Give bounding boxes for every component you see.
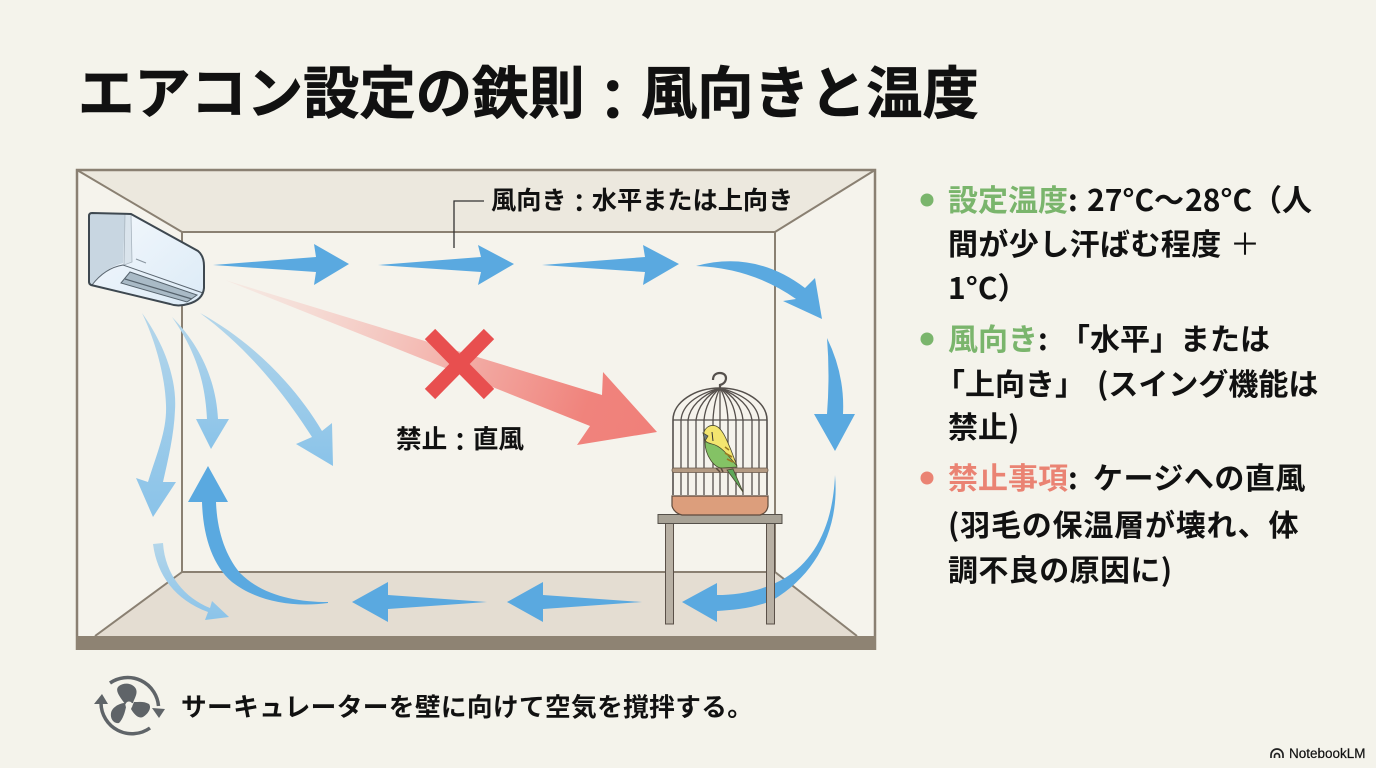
arrows: floor airflow	[188, 466, 836, 622]
floor front edge	[76, 636, 876, 650]
item: set temperature: 設定温度	[948, 176, 1068, 220]
item: wind direction	[920, 315, 1318, 447]
item: wind direction: :	[1038, 315, 1048, 359]
label: forbidden direct wind: 直風	[473, 419, 524, 456]
bullet list	[920, 176, 1318, 590]
budgerigar	[703, 426, 743, 492]
item: set temperature: ＋	[1230, 220, 1260, 264]
item: set temperature: 間が少し汗ばむ程度	[948, 220, 1222, 264]
cage wires	[673, 373, 767, 495]
item: set temperature: 28°C	[1185, 176, 1252, 220]
room illustration	[76, 170, 876, 650]
birdcage with budgerigar	[672, 373, 768, 515]
arrows: upper airflow	[213, 244, 855, 451]
room outline	[77, 170, 875, 650]
ceiling	[77, 170, 875, 232]
item: set temperature: :	[1068, 176, 1078, 220]
label: wind direction: 風向き	[491, 181, 567, 217]
item: set temperature: ～	[1154, 176, 1184, 220]
item: prohibited: (羽毛の保温層が壊れ、体	[948, 501, 1299, 545]
item: prohibited: :	[1068, 454, 1078, 498]
room wall background	[77, 170, 875, 650]
item: prohibited: 調不良の原因に)	[948, 546, 1173, 590]
forbidden direct airflow arrow	[225, 280, 657, 445]
item: prohibited: 禁止事項	[948, 454, 1068, 498]
item: prohibited	[920, 454, 1306, 590]
label: wind direction: 水平または上向き	[592, 181, 793, 217]
item: wind direction: 「水平」または	[1060, 315, 1270, 359]
X mark	[430, 334, 489, 394]
air conditioner	[89, 213, 204, 306]
item: set temperature: （人	[1252, 176, 1312, 220]
circulator note: サーキュレーターを壁に向けて空気を撹拌する。	[181, 687, 753, 724]
label: forbidden direct wind: ：	[447, 422, 473, 459]
perch	[672, 468, 768, 472]
title: 風向きと温度	[641, 49, 979, 130]
floor	[95, 572, 857, 636]
item: wind direction: (スイング機能は	[1097, 360, 1318, 404]
item: set temperature: 27°C	[1087, 176, 1154, 220]
leader line	[454, 201, 484, 248]
item: set temperature: 1°C）	[948, 264, 1028, 308]
table	[658, 514, 782, 624]
item: wind direction: 「上向き」	[935, 360, 1085, 404]
NotebookLM logo: NotebookLM	[1289, 746, 1366, 761]
item: set temperature	[920, 176, 1312, 308]
icon: circulator fan	[94, 678, 165, 734]
title: エアコン設定の鉄則	[78, 49, 585, 130]
title: ：	[585, 56, 641, 137]
label: wind direction: ：	[567, 184, 592, 220]
label: forbidden direct wind: 禁止	[396, 419, 447, 456]
cage base	[672, 496, 768, 515]
item: wind direction: 風向き	[948, 315, 1038, 359]
item: prohibited: ケージへの直風	[1093, 454, 1306, 498]
item: wind direction: 禁止)	[948, 403, 1019, 447]
arrows: downward light airflow	[136, 313, 333, 620]
